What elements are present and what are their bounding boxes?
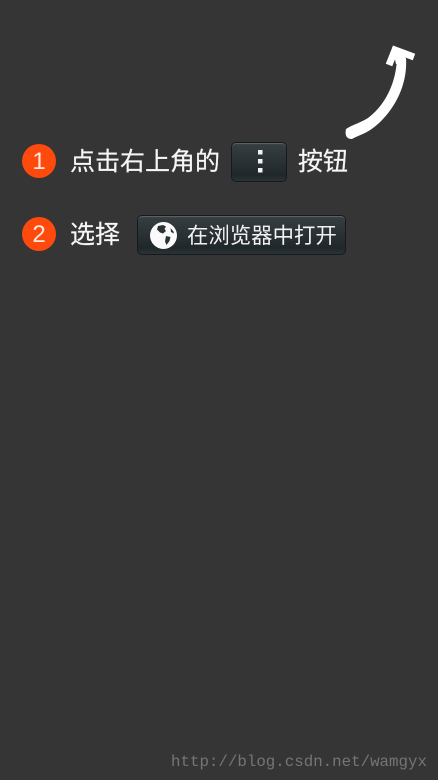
arrow pointing to top-right corner <box>346 46 416 139</box>
step 2 number badge: 2 <box>32 221 46 248</box>
three-dot menu button <box>231 142 287 182</box>
step 1 text: after button: 按钮 <box>298 148 348 176</box>
step 2 number badge <box>22 217 56 251</box>
button label: 在浏览器中打开 <box>187 224 337 248</box>
open in browser button <box>137 215 346 255</box>
watermark url: http://blog.csdn.net/wamgyx <box>171 753 427 771</box>
step 1 number badge: 1 <box>32 148 46 175</box>
icon: globe <box>150 222 177 249</box>
step 1 number badge <box>22 144 56 178</box>
step 2 text: 选择 <box>70 221 120 249</box>
icon: vertical dots <box>258 150 262 172</box>
step 1 text: before button: 点击右上角的 <box>70 148 220 176</box>
